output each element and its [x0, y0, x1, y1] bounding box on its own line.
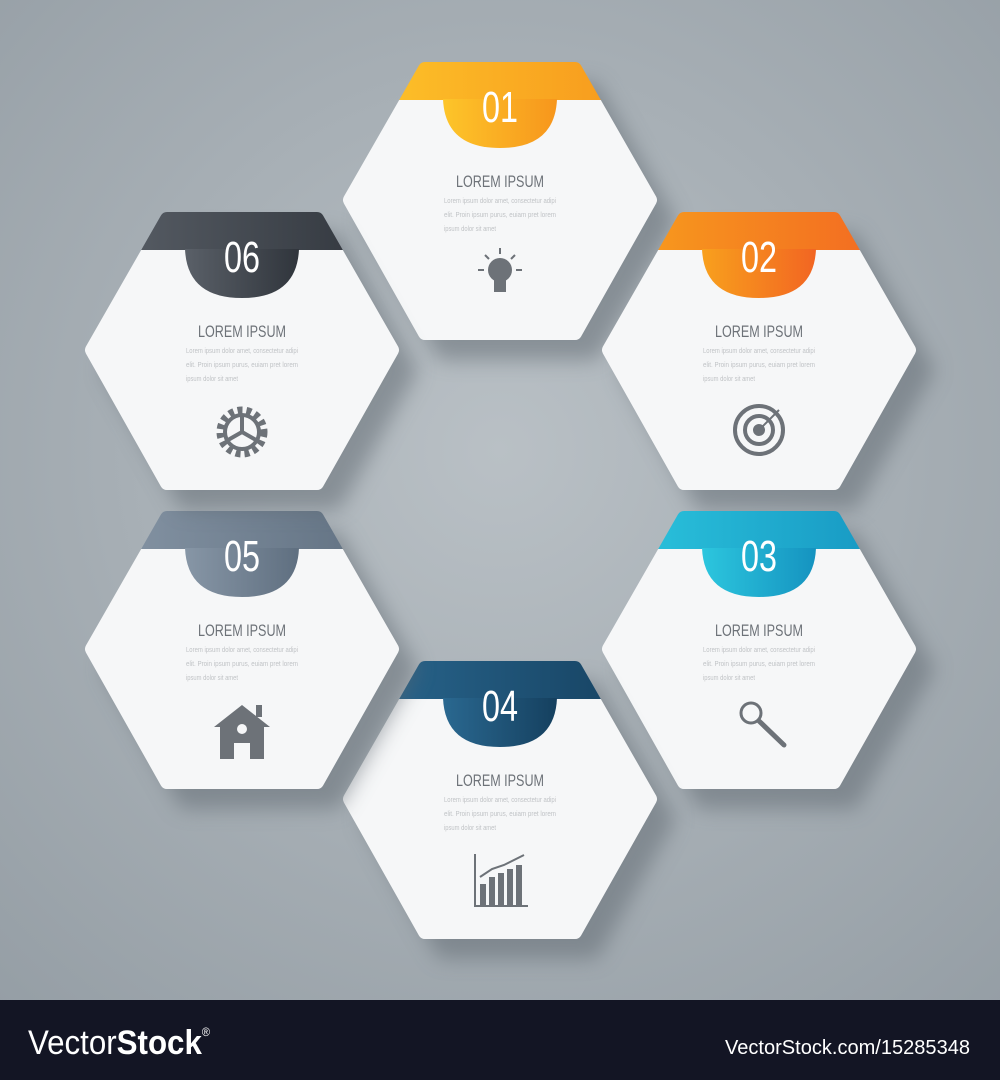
hexagon 03 [609, 518, 927, 802]
footer logo: ® [202, 1025, 210, 1039]
footer logo: VectorStock [28, 1024, 209, 1062]
icon: house [214, 705, 270, 759]
hexagon 01: 01 [482, 83, 518, 132]
icon: light bulb [478, 248, 522, 292]
footer url: VectorStock.com/15285348 [725, 1037, 970, 1059]
icon: bar chart [474, 854, 528, 907]
hexagon 01 [350, 69, 668, 353]
footer bar [0, 1000, 1000, 1080]
icon: magnifier [741, 703, 784, 745]
icon: gear [220, 410, 264, 454]
hexagon 04: 04 [482, 682, 518, 731]
hexagon 06: 06 [224, 233, 260, 282]
hexagon 02: 02 [741, 233, 777, 282]
hexagon 02 [609, 219, 927, 503]
icon: target [735, 406, 783, 454]
hexagon 06 [92, 219, 410, 503]
hexagon 04 [350, 668, 668, 952]
hexagon 05: 05 [224, 532, 260, 581]
hexagon 05 [92, 518, 410, 802]
hexagon 03: 03 [741, 532, 777, 581]
